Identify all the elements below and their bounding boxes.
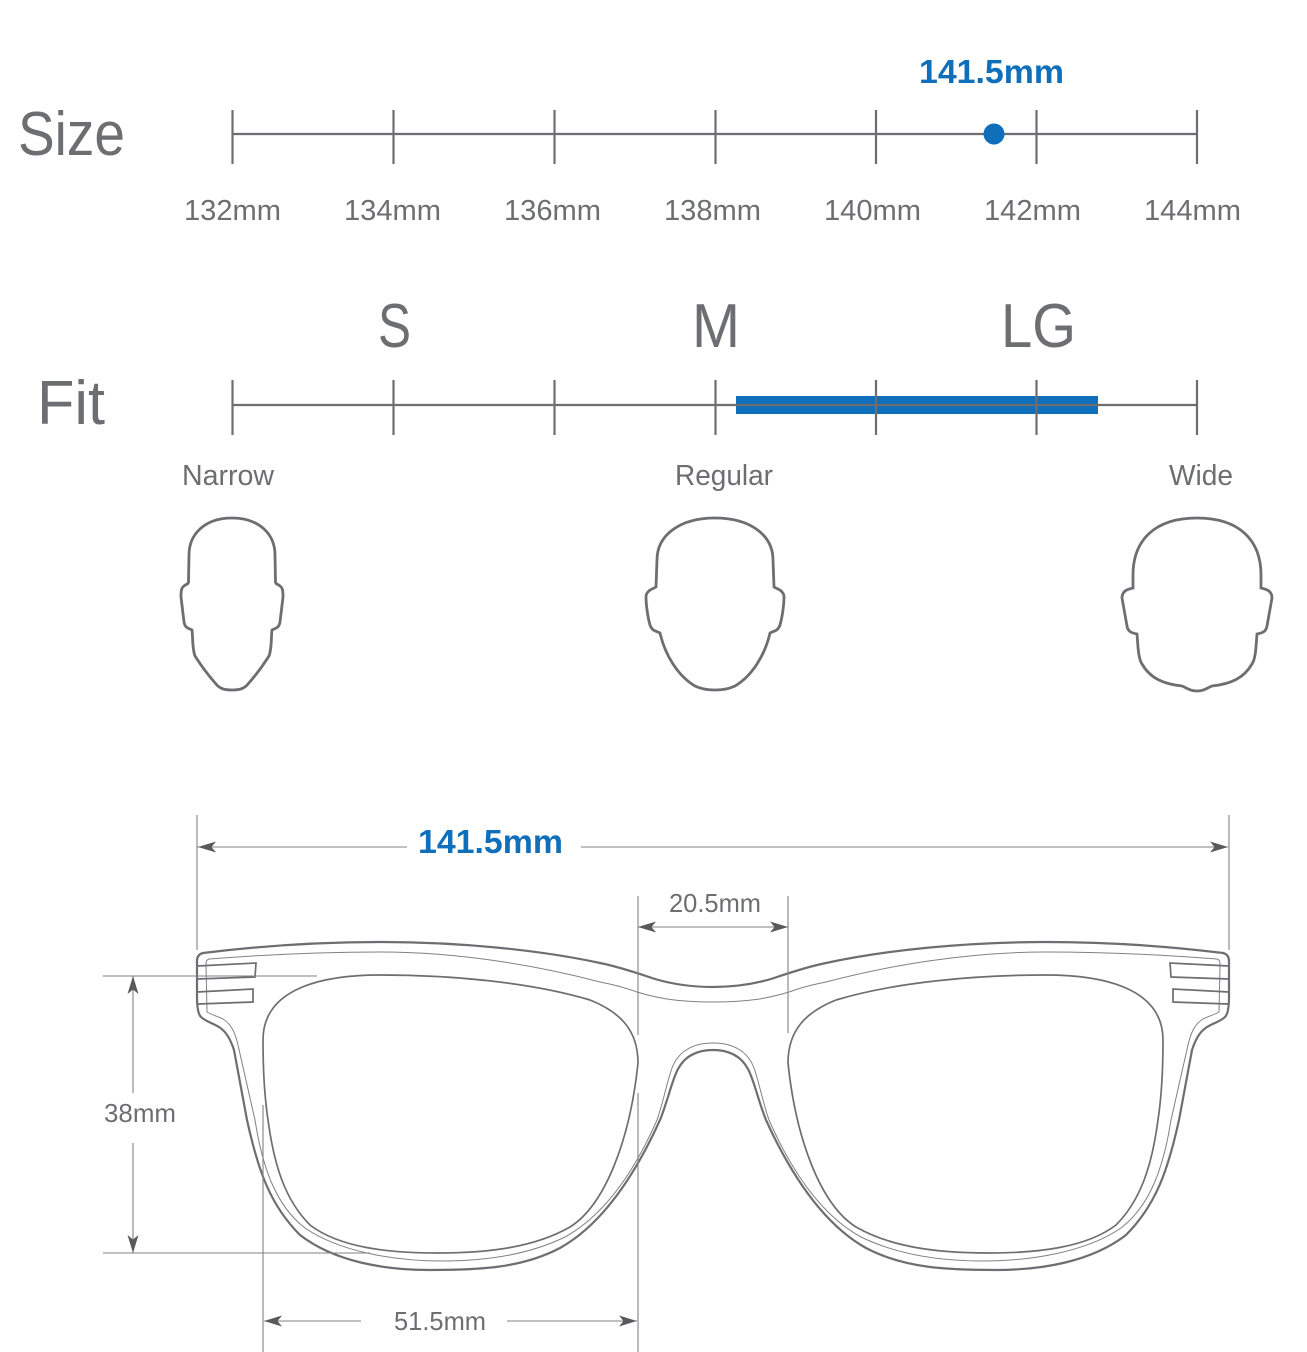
size tick labels <box>184 195 1241 227</box>
size tick labels: 136mm <box>504 195 601 227</box>
dimension: bridge 20.5mm <box>638 888 788 1035</box>
size tick labels: 140mm <box>824 195 921 227</box>
size value label: 141.5mm <box>919 53 1064 90</box>
diagram: glasses outline <box>197 942 1229 1270</box>
heading: Fit: Fit <box>37 369 105 438</box>
size marker dot <box>984 124 1004 144</box>
value: 20.5mm: 20.5mm <box>669 888 761 918</box>
value: 141.5mm: 141.5mm <box>418 823 563 860</box>
left half of frame <box>197 942 713 1270</box>
value: 51.5mm: 51.5mm <box>394 1306 486 1336</box>
label: Regular: Regular <box>675 460 773 492</box>
chart: size scale <box>18 53 1241 227</box>
dimension: total width 141.5mm <box>197 815 1229 950</box>
size tick labels: 138mm <box>664 195 761 227</box>
icon: narrow face <box>181 518 283 690</box>
heading: Size: Size <box>18 100 125 169</box>
dimension: lens width 51.5mm <box>263 1093 638 1352</box>
size tick labels: 132mm <box>184 195 281 227</box>
icon: wide face <box>1122 518 1272 691</box>
chart: fit scale <box>37 292 1272 691</box>
size tick labels: 134mm <box>344 195 441 227</box>
fit range bar <box>736 396 1098 414</box>
value: 38mm: 38mm <box>104 1098 176 1128</box>
fit axis line <box>232 380 1197 435</box>
size letter: M: M <box>692 292 740 361</box>
icon: regular face <box>646 518 784 690</box>
label: Narrow: Narrow <box>182 460 275 492</box>
size tick labels: 142mm <box>984 195 1081 227</box>
dimension: lens height 38mm <box>103 976 370 1253</box>
size axis line <box>232 110 1197 164</box>
size tick labels: 144mm <box>1144 195 1241 227</box>
label: Wide: Wide <box>1169 460 1233 492</box>
right half of frame <box>713 942 1229 1270</box>
size letter: LG: LG <box>1001 292 1076 361</box>
size letter: S: S <box>378 292 411 361</box>
